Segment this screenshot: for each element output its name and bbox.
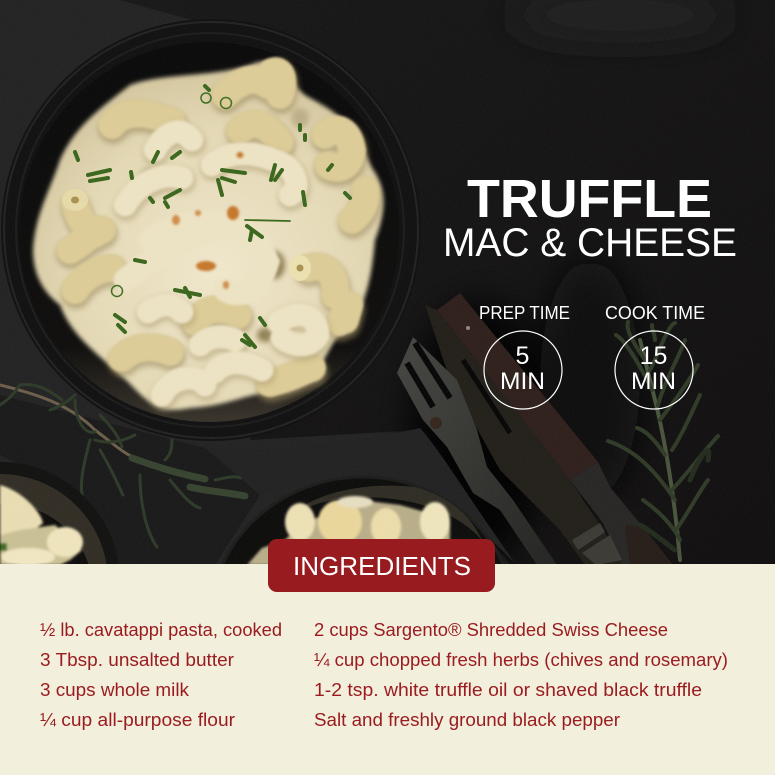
ingredients left column: 3 cups whole milk xyxy=(40,679,190,700)
cook time: COOK TIME xyxy=(605,303,705,323)
ingredients heading xyxy=(268,539,495,592)
cook time: MIN xyxy=(631,368,676,395)
title xyxy=(443,169,737,265)
pasta tubes xyxy=(62,189,311,281)
prep time: PREP TIME xyxy=(479,303,570,323)
cook time: 15 xyxy=(640,342,667,370)
small bowl bottom center xyxy=(210,477,516,767)
prep time xyxy=(479,303,570,409)
cloth fold shading xyxy=(410,0,730,560)
title: TRUFFLE xyxy=(467,169,712,229)
ingredients right column: Salt and freshly ground black pepper xyxy=(314,709,620,730)
ingredients left column xyxy=(40,619,282,730)
ingredients right column: ¼ cup chopped fresh herbs (chives and rosemary) xyxy=(314,649,728,670)
metal bolster xyxy=(570,462,673,565)
pasta cream xyxy=(125,132,318,395)
prep time: 5 xyxy=(516,342,529,370)
cook time xyxy=(605,303,705,409)
rosemary right xyxy=(608,322,718,560)
macaroni xyxy=(33,62,383,410)
ingredients right column xyxy=(314,619,728,730)
small bowl bottom left xyxy=(0,462,120,702)
rosemary left xyxy=(0,385,245,547)
chives xyxy=(75,86,350,347)
main bowl xyxy=(1,19,421,441)
photo grain xyxy=(0,0,775,565)
ingredients left column: ½ lb. cavatappi pasta, cooked xyxy=(40,619,282,640)
lower cloth fold xyxy=(205,428,515,563)
cream pasta shadows xyxy=(126,135,319,398)
title: MAC & CHEESE xyxy=(443,221,737,265)
ingredients panel xyxy=(0,539,775,775)
ingredients left column: ¼ cup all-purpose flour xyxy=(40,709,235,730)
pasta gold xyxy=(70,71,366,383)
ingredients right column: 2 cups Sargento® Shredded Swiss Cheese xyxy=(314,619,668,640)
ingredients right column: 1-2 tsp. white truffle oil or shaved black truffle xyxy=(314,679,702,700)
ingredients heading: INGREDIENTS xyxy=(293,551,471,581)
knife and fork xyxy=(397,293,673,565)
browned spots xyxy=(172,152,244,289)
front fork xyxy=(397,337,557,565)
slate surface xyxy=(0,395,260,565)
prep time: MIN xyxy=(500,368,545,395)
ingredients left column: 3 Tbsp. unsalted butter xyxy=(40,649,234,670)
second handle xyxy=(425,305,625,565)
pasta shadows xyxy=(71,75,367,387)
wood handle xyxy=(437,293,598,480)
shaded gaps xyxy=(140,108,309,342)
dark cloth xyxy=(120,0,775,565)
bracket xyxy=(572,523,622,565)
